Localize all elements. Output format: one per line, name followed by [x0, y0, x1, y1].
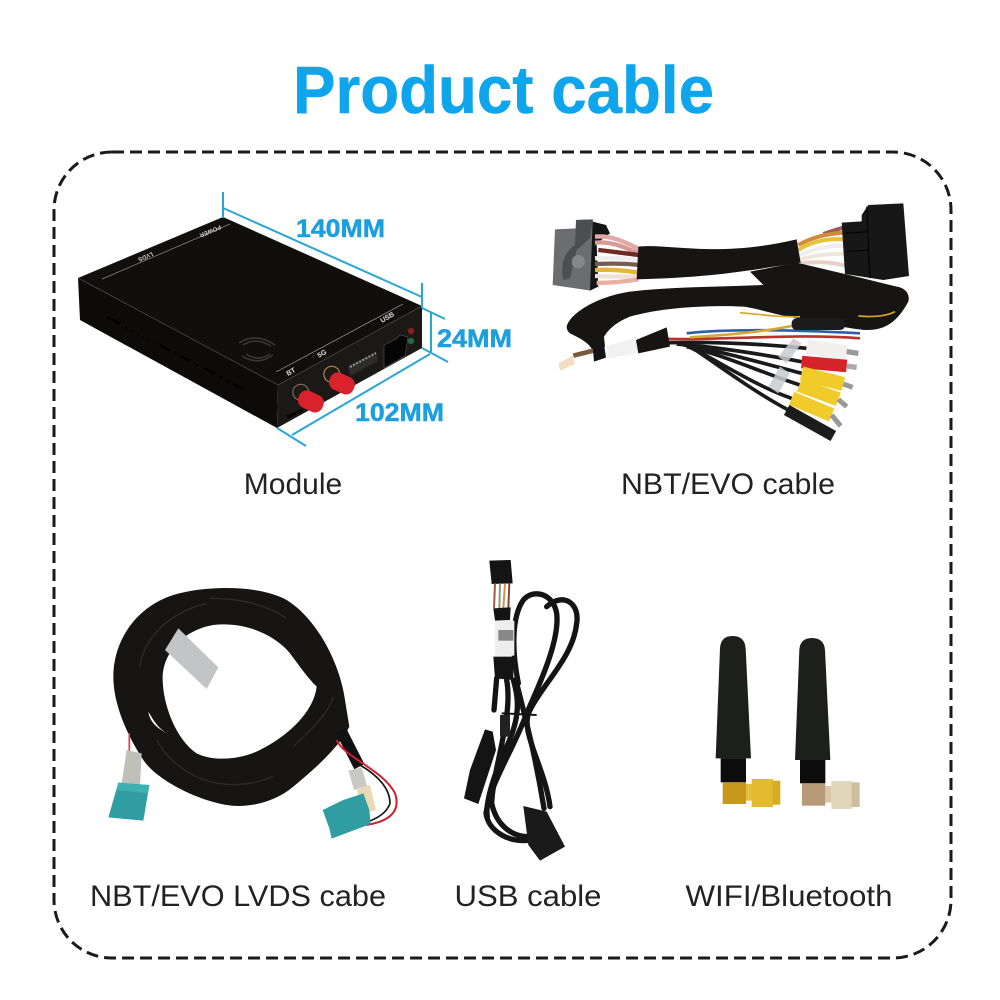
6-pin connector — [489, 560, 513, 584]
title: Product cable — [293, 53, 714, 128]
cable tie — [502, 713, 537, 715]
antenna silver — [795, 638, 860, 809]
dimension: width: 102MM — [355, 399, 444, 427]
sleeve top — [637, 239, 801, 279]
coiled cable — [486, 594, 577, 841]
sleeve lower — [636, 327, 670, 353]
heat shrink — [493, 607, 511, 621]
module box: USB — [380, 311, 396, 325]
right connector — [842, 203, 909, 280]
clear clips — [768, 338, 802, 393]
barcode label — [495, 621, 514, 656]
product: NBT/EVO cable — [553, 203, 909, 436]
right connector — [323, 730, 397, 839]
RCA white — [807, 347, 858, 353]
sleeve loop — [567, 263, 909, 352]
dimension: height: 24MM — [437, 325, 512, 353]
label: module: Module — [244, 468, 342, 501]
small connector — [558, 337, 637, 371]
product: LVDS cable — [108, 588, 397, 839]
RCA red — [802, 362, 857, 367]
connector: 5G antenna — [319, 364, 359, 397]
RCA yellow 1 — [802, 373, 853, 387]
label: NBT/EVO cable: NBT/EVO cable — [621, 468, 835, 501]
panel: dashed product frame — [54, 152, 951, 958]
module box: LVDS — [137, 250, 154, 262]
wires right — [798, 227, 847, 266]
icon: wireless charging — [239, 338, 275, 361]
audio jack — [464, 729, 496, 804]
dimension lines — [223, 192, 448, 446]
dimension: length: 140MM — [296, 215, 385, 243]
wires left — [595, 236, 640, 283]
black cables — [668, 342, 807, 410]
module box: BT — [286, 367, 298, 378]
module box: POWER — [198, 223, 222, 238]
RCA yellow 3 — [792, 398, 841, 426]
label: USB cable: USB cable — [454, 880, 602, 913]
front ports — [348, 352, 378, 376]
antenna gold — [716, 636, 780, 807]
label: WIFI/Bluetooth: WIFI/Bluetooth — [686, 880, 892, 913]
product: module with dimensions — [78, 192, 512, 446]
product: USB cable — [464, 560, 577, 861]
left connector — [553, 219, 610, 291]
USB plug — [523, 806, 565, 861]
braided loop — [113, 588, 349, 806]
inline switch — [792, 318, 845, 330]
connector: BT antenna — [288, 382, 328, 415]
module box: 5G — [316, 349, 329, 360]
braid highlights — [140, 598, 333, 785]
coloured wires — [668, 326, 860, 339]
audio jack — [787, 410, 833, 436]
product: antennas — [716, 636, 860, 809]
label: LVDS cable: NBT/EVO LVDS cabe — [90, 880, 386, 913]
tracer wires — [740, 312, 895, 317]
RCA yellow 2 — [799, 385, 847, 407]
left connector — [108, 733, 149, 821]
sleeve — [493, 657, 513, 680]
wires — [494, 583, 509, 608]
module box — [78, 217, 422, 428]
tag — [165, 628, 218, 689]
